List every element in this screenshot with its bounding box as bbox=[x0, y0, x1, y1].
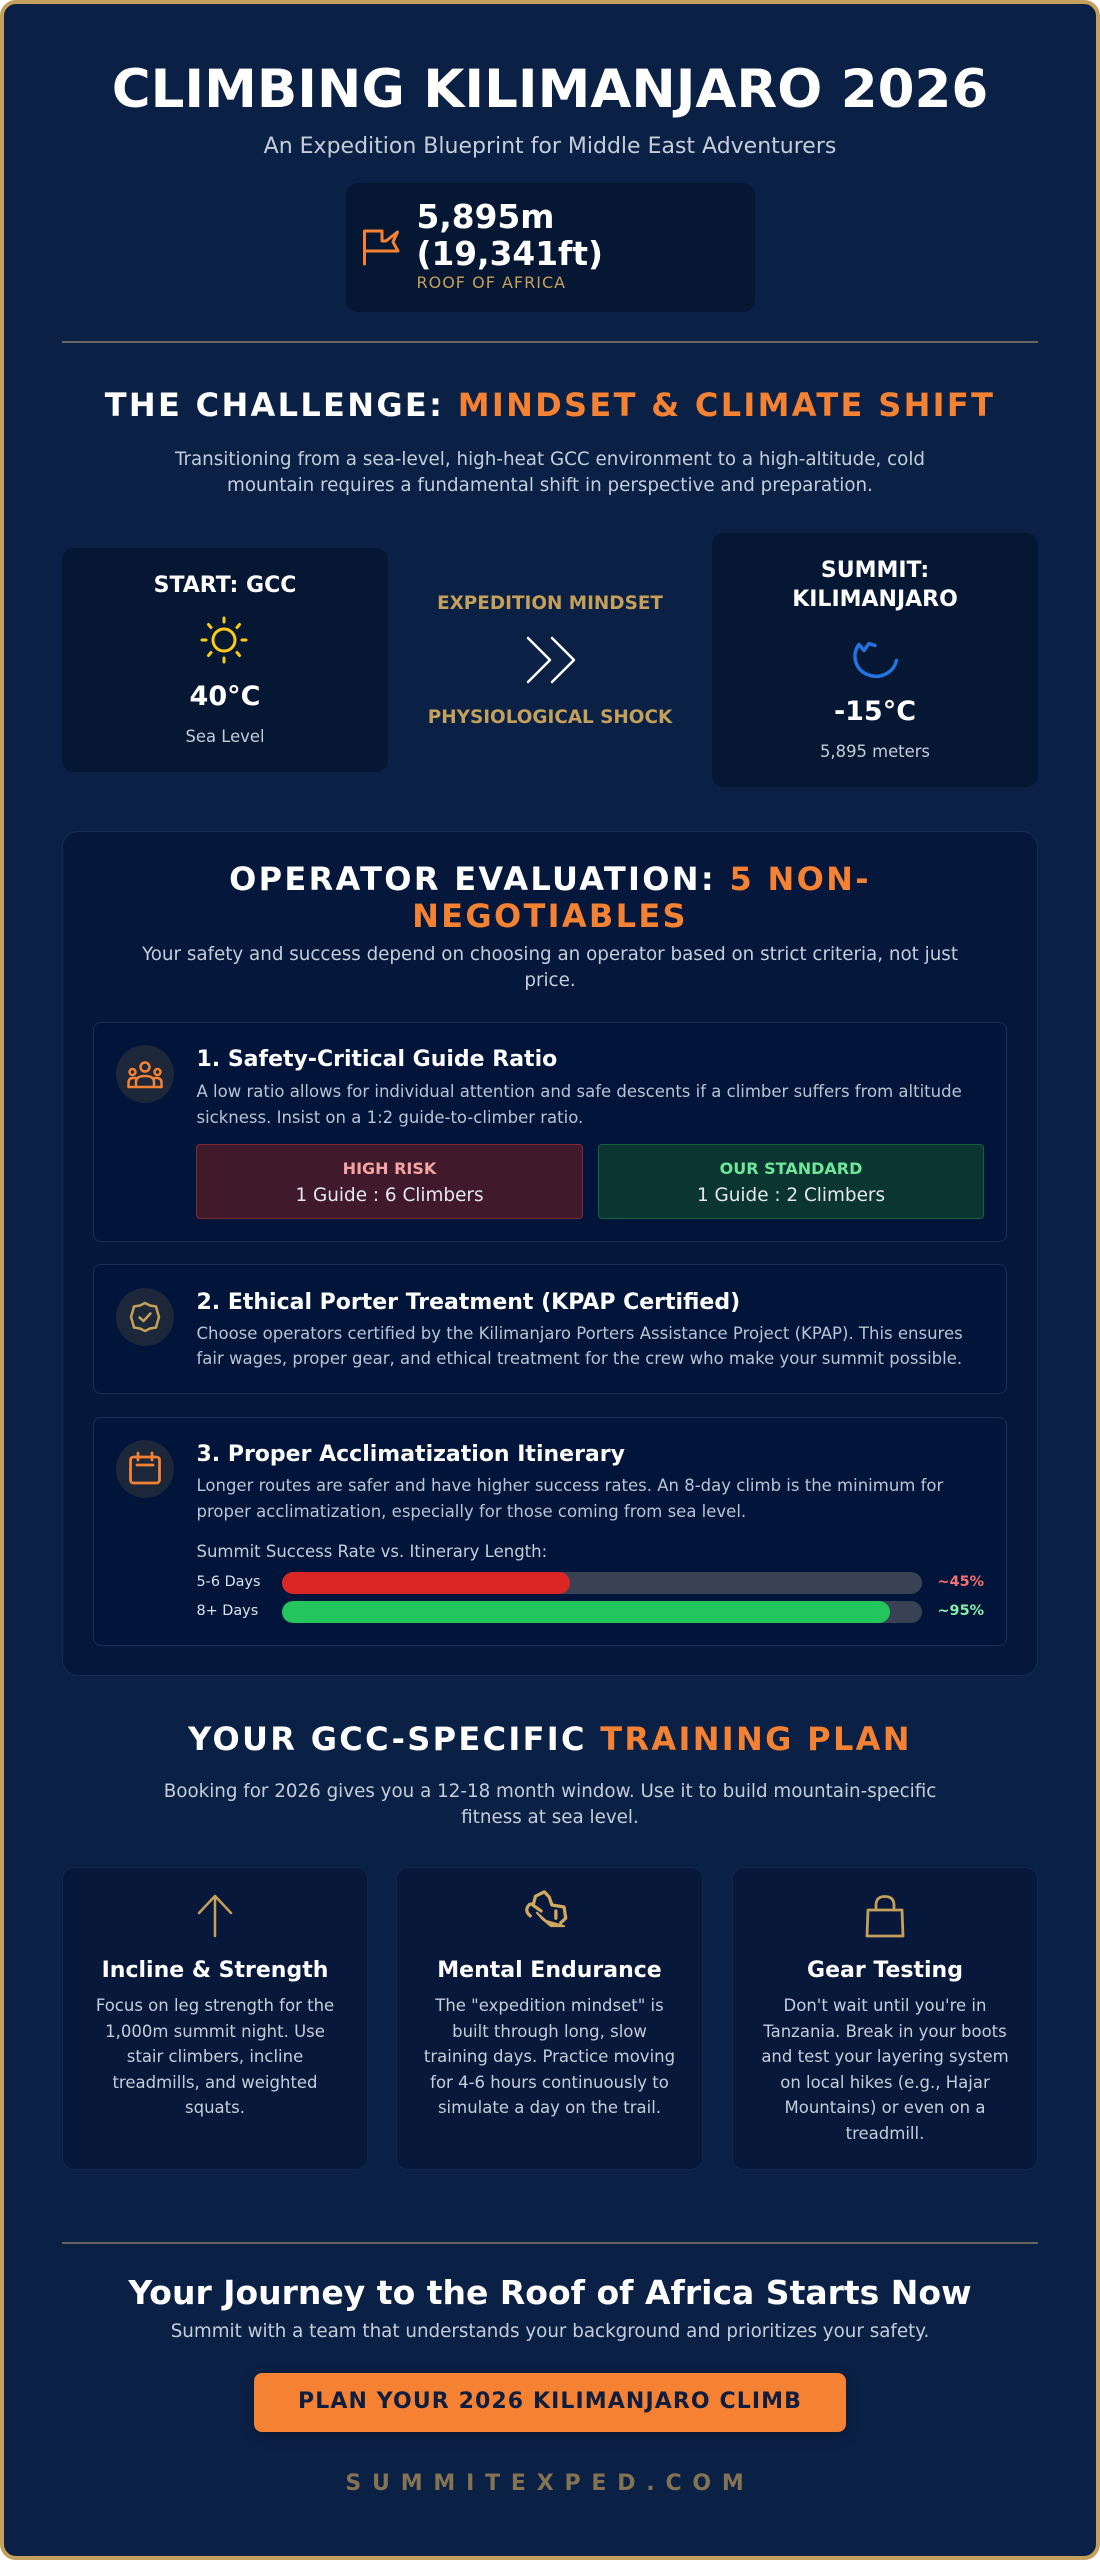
gear text: on local hikes (e.g., Hajar bbox=[780, 2073, 990, 2092]
card: gear testing bbox=[732, 1867, 1038, 2170]
heading: the challenge: THE CHALLENGE: MINDSET & CLIMATE SHIFT bbox=[105, 386, 995, 424]
card: incline and strength bbox=[62, 1867, 368, 2170]
gear text: treadmill. bbox=[846, 2124, 924, 2143]
porter description bbox=[196, 1324, 963, 1368]
gear text: Don't wait until you're in bbox=[784, 1996, 986, 2015]
high risk label: HIGH RISK bbox=[343, 1159, 436, 1178]
card: acclimatization itinerary bbox=[93, 1417, 1007, 1646]
operator intro text bbox=[142, 944, 958, 991]
comparison: our standard bbox=[598, 1144, 984, 1219]
card: ethical porter treatment bbox=[93, 1264, 1007, 1394]
summit altitude: 5,895 meters bbox=[820, 742, 930, 761]
row label: 8+ days: 8+ Days bbox=[196, 1603, 258, 1619]
mental text: training days. Practice moving bbox=[424, 2047, 675, 2066]
value: 45 percent: ~45% bbox=[938, 1574, 984, 1590]
panel: operator evaluation bbox=[62, 831, 1038, 1676]
guide ratio description: sickness. Insist on a 1:2 guide-to-climber ratio. bbox=[196, 1108, 583, 1127]
call to action button bbox=[254, 2373, 846, 2432]
subtitle: An Expedition Blueprint for Middle East Adventurers bbox=[264, 134, 836, 159]
incline text: stair climbers, incline bbox=[127, 2047, 303, 2066]
gear text bbox=[761, 1996, 1009, 2143]
porter title: 2. Ethical Porter Treatment (KPAP Certified) bbox=[196, 1290, 740, 1314]
icon: certified badge bbox=[116, 1288, 174, 1346]
training intro text bbox=[164, 1780, 936, 1828]
icon: flag bbox=[363, 230, 400, 266]
guide ratio description: A low ratio allows for individual attention and safe descents if a climber suffers from altitude bbox=[196, 1082, 962, 1101]
gear text: and test your layering system bbox=[761, 2047, 1009, 2066]
icon: calendar bbox=[116, 1440, 174, 1498]
closing heading: Your Journey to the Roof of Africa Starts Now bbox=[128, 2273, 972, 2312]
chart title: Summit Success Rate vs. Itinerary Length: bbox=[196, 1542, 547, 1561]
operator heading bbox=[229, 860, 871, 935]
start heading: START: GCC bbox=[154, 573, 296, 598]
operator intro text: Your safety and success depend on choosing an operator based on strict criteria, not just bbox=[142, 944, 958, 965]
operator heading: OPERATOR EVALUATION: 5 NON- bbox=[229, 860, 871, 898]
incline text: squats. bbox=[185, 2098, 245, 2117]
itinerary description bbox=[196, 1476, 944, 1521]
panel: summit bbox=[712, 533, 1038, 787]
summit heading: KILIMANJARO bbox=[792, 587, 958, 612]
transition column bbox=[428, 593, 673, 728]
gear title: Gear Testing bbox=[807, 1958, 963, 1983]
summit heading: SUMMIT: bbox=[821, 558, 929, 583]
call to action button: PLAN YOUR 2026 KILIMANJARO CLIMB bbox=[298, 2389, 802, 2414]
title: CLIMBING KILIMANJARO 2026 bbox=[112, 59, 988, 120]
guide ratio description bbox=[196, 1082, 962, 1127]
incline text: Focus on leg strength for the bbox=[96, 1996, 334, 2015]
summit temperature: -15°C bbox=[834, 696, 916, 727]
challenge intro text: mountain requires a fundamental shift in perspective and preparation. bbox=[227, 474, 873, 496]
high risk ratio: 1 Guide : 6 Climbers bbox=[295, 1184, 484, 1206]
stat badge: summit altitude bbox=[346, 183, 755, 312]
training intro text: Booking for 2026 gives you a 12-18 month window. Use it to build mountain-specific bbox=[164, 1780, 936, 1802]
altitude caption: ROOF OF AFRICA bbox=[416, 273, 566, 292]
itinerary title: 3. Proper Acclimatization Itinerary bbox=[196, 1442, 625, 1467]
icon: shopping bag bbox=[866, 1895, 904, 1938]
row label: 5-6 days: 5-6 Days bbox=[196, 1574, 260, 1590]
start altitude: Sea Level bbox=[185, 727, 264, 746]
incline text: 1,000m summit night. Use bbox=[105, 2022, 325, 2041]
challenge intro text: Transitioning from a sea-level, high-heat GCC environment to a high-altitude, cold bbox=[175, 448, 925, 470]
icon: sun bbox=[200, 616, 248, 664]
mental title: Mental Endurance bbox=[437, 1958, 662, 1983]
incline text: treadmills, and weighted bbox=[112, 2073, 318, 2092]
value: 95 percent: ~95% bbox=[938, 1603, 984, 1619]
operator heading: NEGOTIABLES bbox=[412, 897, 688, 935]
challenge intro text bbox=[174, 448, 925, 496]
heading: training plan: YOUR GCC-SPECIFIC TRAINING PLAN bbox=[188, 1720, 912, 1758]
comparison: high risk bbox=[196, 1144, 583, 1219]
bar: 8+ days bbox=[282, 1601, 922, 1623]
porter description: fair wages, proper gear, and ethical treatment for the crew who make your summit possible. bbox=[196, 1349, 962, 1368]
closing subtext: Summit with a team that understands your background and prioritizes your safety. bbox=[171, 2320, 929, 2342]
itinerary description: Longer routes are safer and have higher success rates. An 8-day climb is the minimum for bbox=[196, 1476, 943, 1495]
altitude value: (19,341ft) bbox=[416, 234, 603, 272]
mental text: The "expedition mindset" is bbox=[435, 1996, 664, 2015]
summit heading bbox=[792, 558, 958, 612]
card: guide ratio bbox=[93, 1022, 1007, 1242]
operator intro text: price. bbox=[524, 970, 576, 991]
gear text: Tanzania. Break in your boots bbox=[763, 2022, 1007, 2041]
icon: double chevron arrow bbox=[526, 636, 576, 684]
altitude value bbox=[416, 198, 603, 272]
start temperature: 40°C bbox=[190, 681, 260, 712]
icon: guide group bbox=[116, 1045, 174, 1103]
mental text: for 4-6 hours continuously to bbox=[430, 2073, 669, 2092]
incline text bbox=[96, 1996, 334, 2117]
website footer: SUMMITEXPED.COM bbox=[345, 2470, 755, 2496]
our standard label: OUR STANDARD bbox=[720, 1159, 862, 1178]
bar: 5-6 days bbox=[282, 1572, 922, 1594]
gear text: Mountains) or even on a bbox=[785, 2098, 985, 2117]
incline title: Incline & Strength bbox=[102, 1958, 328, 1983]
training intro text: fitness at sea level. bbox=[461, 1806, 639, 1828]
chart: summit success rate bbox=[196, 1542, 984, 1623]
label: expedition mindset: EXPEDITION MINDSET bbox=[437, 593, 663, 614]
panel: start GCC bbox=[62, 548, 388, 772]
card: mental endurance bbox=[396, 1867, 703, 2170]
porter description: Choose operators certified by the Kilimanjaro Porters Assistance Project (KPAP). This ensures bbox=[196, 1324, 963, 1342]
mental text: simulate a day on the trail. bbox=[438, 2098, 661, 2117]
guide ratio title: 1. Safety-Critical Guide Ratio bbox=[196, 1047, 557, 1072]
mental text: built through long, slow bbox=[452, 2022, 647, 2041]
altitude value: 5,895m bbox=[416, 198, 554, 236]
our standard ratio: 1 Guide : 2 Climbers bbox=[697, 1184, 885, 1206]
mental text bbox=[424, 1996, 675, 2117]
icon: mental endurance bbox=[525, 1890, 568, 1928]
icon: up arrow bbox=[198, 1894, 232, 1938]
icon: crescent moon bbox=[853, 642, 898, 678]
itinerary description: proper acclimatization, especially for those coming from sea level. bbox=[196, 1502, 746, 1521]
label: physiological shock: PHYSIOLOGICAL SHOCK bbox=[428, 707, 672, 728]
